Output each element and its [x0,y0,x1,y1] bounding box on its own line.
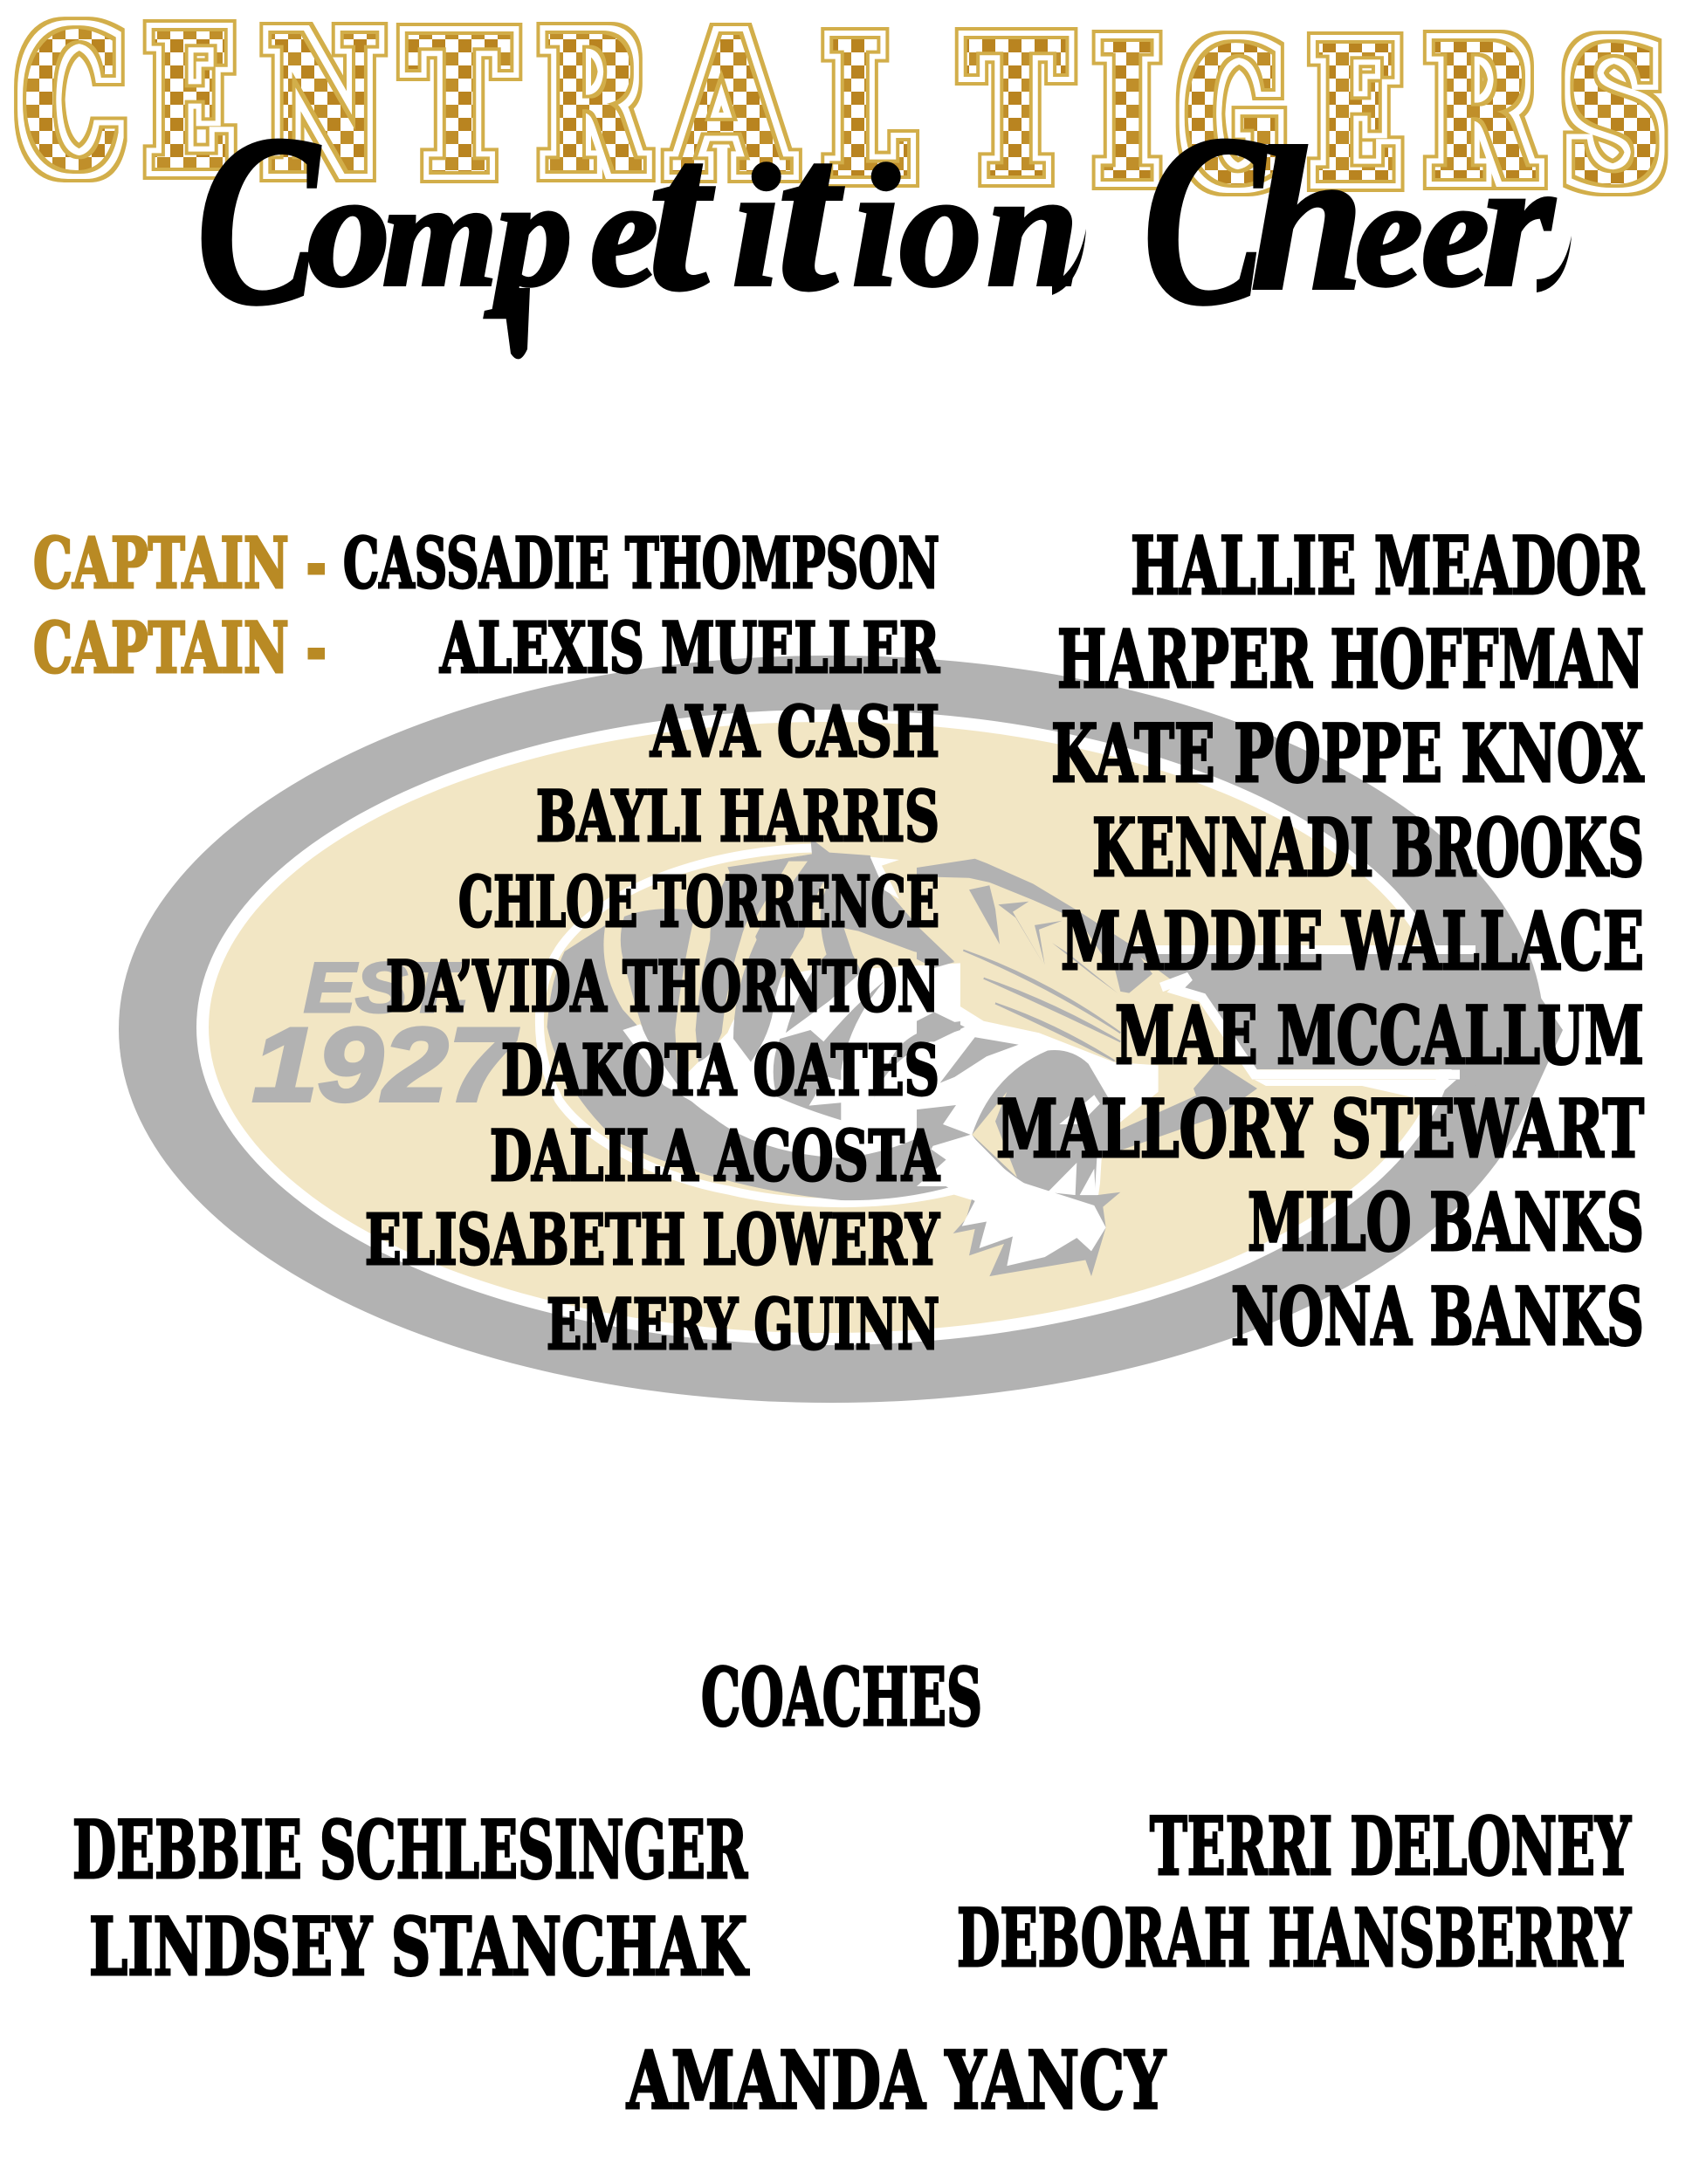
script word: Cheer: r [1482,122,1556,325]
script word: Competition: i [851,130,900,323]
title: Competition Cheer script [196,84,1572,359]
script word: Cheer [1143,84,1572,355]
roster: left column [343,522,940,1365]
letters: L [828,1,910,220]
coaches names: LINDSEY STANCHAK [89,1901,749,1994]
letters [21,0,1664,226]
script word: Competition: e [590,148,658,318]
letters: N [266,0,381,215]
roster: left column: AVA CASH [650,690,939,773]
roster: left column: DALILA ACOSTA [490,1115,940,1197]
letters: R [1429,3,1536,223]
roster: left column: ALEXIS MUELLER [439,607,939,689]
script word: Competition: p [485,148,573,318]
script word: Cheer: e [1355,148,1423,318]
script word: Cheer: e [1421,148,1489,318]
roster: left column: ELISABETH LOWERY [365,1198,940,1281]
roster: left column: CHLOE TORRENCE [458,861,939,943]
roster: left column: DAKOTA OATES [501,1029,939,1111]
title: CENTRAL TIGERS varsity letters [21,0,1664,226]
logo tiger head [540,838,1159,1276]
letters: S [1565,7,1664,226]
roster: left column: DA’VIDA THORNTON [386,945,939,1027]
logo G crossbar [1103,950,1563,1157]
script word: Cheer: h [1250,106,1365,333]
tiger left stripes [540,838,960,1203]
roster: left column: CASSADIE THOMPSON [343,522,939,604]
logo oval ring [119,656,1544,1403]
script word: Competition: t [648,94,714,336]
script word: Competition: n [987,138,1079,321]
letters: I [1098,3,1156,223]
captain labels: CAPTAIN - [33,607,327,689]
letters: A [672,0,790,216]
script word: Competition: i [732,130,781,323]
script word: Competition: o [307,138,390,321]
coaches heading: COACHES [701,1652,982,1744]
script word: Competition: o [899,138,982,321]
roster: left column: EMERY GUINN [547,1283,939,1365]
tiger face white base [917,971,1159,1204]
script word: Competition: m [382,153,498,317]
script word: Competition: t [777,94,843,336]
script word: Competition: C [196,84,322,355]
coaches names [72,1801,1632,2127]
coaches names: DEBBIE SCHLESINGER [72,1804,748,1897]
captain labels [33,522,327,689]
captain labels: CAPTAIN - [33,522,327,604]
roster: left column: BAYLI HARRIS [536,775,939,857]
tiger right side: ridge, whiskers, eye, jaw [917,859,1152,1276]
logo EST 1927 [252,949,519,1123]
letters: R [543,0,643,215]
script word: Cheer: C [1143,84,1269,355]
letters: T [407,0,512,216]
logo EST 1927: 1927 [252,1006,519,1123]
letters: T [966,1,1067,220]
coaches names: AMANDA YANCY [626,2035,1166,2127]
letters: G [1183,7,1284,226]
roster: right column [996,520,1645,1363]
letters: E [1314,5,1398,224]
logo EST 1927: EST. [304,949,471,1027]
script word: Competition [196,84,1086,359]
logo: tiger oval watermark [119,656,1563,1403]
